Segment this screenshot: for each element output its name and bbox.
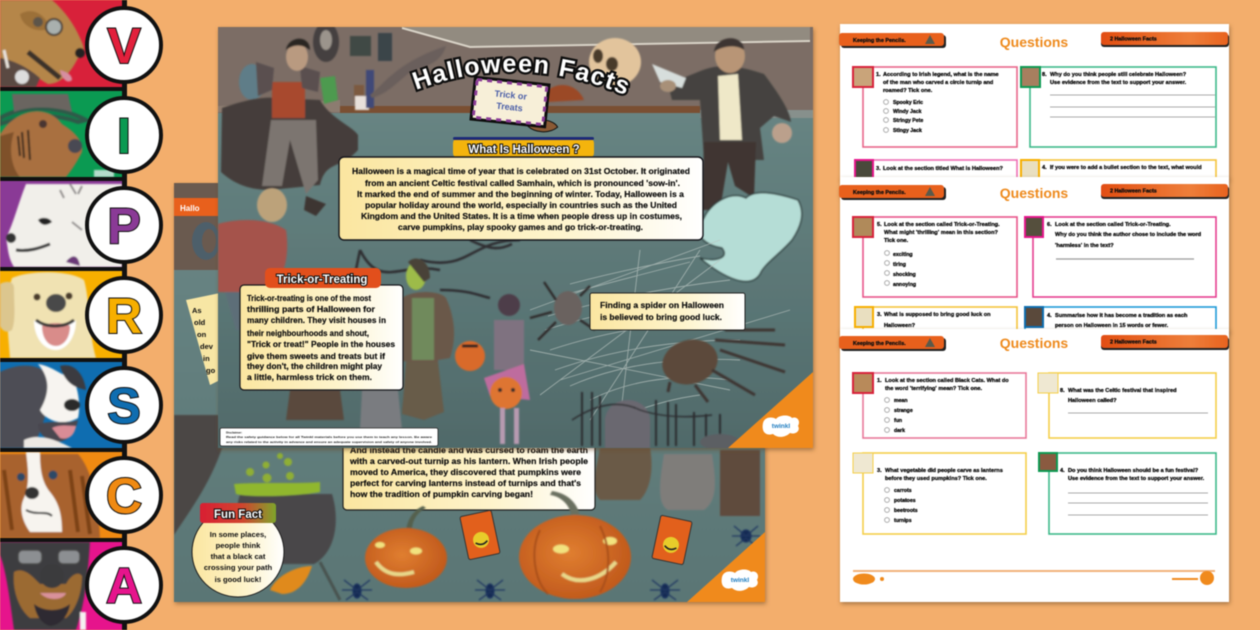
badge: striped label: Treats xyxy=(496,101,523,113)
band divider xyxy=(0,538,125,542)
twinkl corner xyxy=(687,532,765,602)
question box 3: turnips xyxy=(894,518,912,524)
question box 4 xyxy=(1025,307,1216,333)
worksheet title: Questions xyxy=(1000,34,1068,50)
text panel: Jack o'lantern story: how the tradition of pumpkin carving began! xyxy=(350,489,533,499)
spider fact callout: is believed to bring good luck. xyxy=(600,312,722,322)
question box 4: 4. xyxy=(1042,165,1047,171)
text panel: What Is Halloween xyxy=(339,157,703,240)
letter badge: P xyxy=(87,188,161,262)
text panel: Trick-or-Treating: Trick-or-treating is one of the most xyxy=(247,293,371,303)
letter badge: C: C xyxy=(106,468,142,524)
spider fact callout xyxy=(590,293,745,330)
text panel: What Is Halloween: from an ancient Celtic festival called Samhain, which is pronounced 'sow-in'. xyxy=(365,178,680,188)
question box 4: If you were to add a bullet section to the text, what would xyxy=(1050,165,1202,171)
slanted text note: old xyxy=(194,318,206,327)
worksheet header left xyxy=(839,185,946,200)
heading banner: What Is Halloween xyxy=(453,137,594,158)
question box 3: beetroots xyxy=(894,508,918,514)
bat xyxy=(370,46,446,98)
letter badge: R: R xyxy=(106,288,142,344)
question box 3 xyxy=(853,453,1026,534)
question box 1: strange xyxy=(894,408,913,414)
question box 2: Why do you think people still celebrate Halloween? xyxy=(1050,72,1187,78)
text panel: Jack o'lantern story: And instead the candle and was cursed to roam the earth xyxy=(350,445,588,455)
letter badge: S xyxy=(87,368,161,442)
question box 2: Look at the section called Trick-or-Treating. xyxy=(1055,222,1171,228)
worksheet title: Questions xyxy=(1000,185,1068,201)
twinkl corner: twinkl xyxy=(772,423,790,430)
back slide wall and heading strip: Hallo xyxy=(180,204,200,213)
worksheet header left: Keeping the Pencils. xyxy=(853,38,906,44)
letter badge: A xyxy=(87,548,161,622)
worksheet header right: 2 Halloween Facts xyxy=(1110,188,1157,194)
small spider xyxy=(530,282,595,340)
text panel: Trick-or-Treating: thrilling parts of Halloween for xyxy=(247,304,376,314)
question box 2: Halloween called? xyxy=(1068,398,1117,404)
arc path for title xyxy=(416,72,632,98)
slanted text note: in xyxy=(203,354,210,363)
worksheet header right: 2 Halloween Facts xyxy=(1110,340,1157,346)
green-faced boy with bucket xyxy=(398,259,485,420)
text panel: Jack o'lantern story: perfect for carving lanterns instead of turnips and that's xyxy=(350,478,581,488)
question box 4: Do you think Halloween should be a fun festival? xyxy=(1068,468,1199,474)
tree stump and headstone xyxy=(286,390,402,430)
worksheet header right: 2 Halloween Facts xyxy=(1110,36,1157,42)
question box 2 xyxy=(1021,67,1216,147)
question box 1: dark xyxy=(894,428,905,434)
text panel: What Is Halloween: carve pumpkins, play spooky games and go trick-or-treating. xyxy=(398,222,643,232)
text panel: Trick-or-Treating: "Trick or treat!" People in the houses xyxy=(247,339,395,349)
question box 1: annoying xyxy=(893,282,916,288)
question box 3: Look at the section titled What is Halloween? xyxy=(883,166,1004,172)
question box 2: 6. xyxy=(1047,222,1052,228)
ghost xyxy=(699,193,802,281)
question box 3: What is supposed to bring good luck on xyxy=(884,312,991,318)
question box 3: potatoes xyxy=(894,498,916,504)
text panel: Trick-or-Treating: give them sweets and treats but if xyxy=(247,351,385,361)
question box 4: Use evidence from the text to support your answer. xyxy=(1068,476,1205,482)
slanted text note xyxy=(186,293,220,385)
dark tree trunk xyxy=(174,414,222,534)
worksheet header left: Keeping the Pencils. xyxy=(853,190,906,196)
spider web xyxy=(530,240,790,420)
question box 1: the word 'terrifying' mean? Tick one. xyxy=(885,386,982,392)
question box 1 xyxy=(853,67,1017,147)
question box 2: 8. xyxy=(1060,388,1065,394)
band divider xyxy=(0,448,125,452)
dark tree branches xyxy=(354,240,520,300)
pumpkin small xyxy=(365,506,447,588)
worksheet header left xyxy=(839,336,946,351)
panel: worksheet 3 xyxy=(839,329,1229,602)
band: P purple dog xyxy=(0,181,122,267)
question box 2: What was the Celtic festival that inspired xyxy=(1068,388,1177,394)
disclaimer note: Disclaimer: xyxy=(226,430,242,434)
question box 1: of the man who carved a circle turnip and xyxy=(883,80,994,86)
question box 1: mean xyxy=(894,398,908,404)
letter badge: I xyxy=(87,98,161,172)
band divider xyxy=(0,177,125,181)
question box 4 xyxy=(1039,453,1216,534)
letter badge: V xyxy=(87,8,161,82)
slanted text note: go xyxy=(206,366,216,375)
text panel: What Is Halloween: popular holiday around the world, especially in countries such as the United xyxy=(365,200,677,210)
worksheet title: Questions xyxy=(1000,335,1068,351)
jack-o-lantern card right xyxy=(652,515,692,565)
question box 4: 4. xyxy=(1060,468,1065,474)
spine line xyxy=(122,0,127,630)
question box 1 xyxy=(853,217,1017,297)
question box 1: 1. xyxy=(877,378,882,384)
text panel: Trick-or-Treating: a little, harmless trick on them. xyxy=(247,372,372,382)
heading banner: Trick-or-Treating xyxy=(265,268,381,288)
question box 1: exciting xyxy=(893,252,913,258)
question box 3: What vegetable did people carve as lanterns xyxy=(885,468,1003,474)
text panel: What Is Halloween: Halloween is a magical time of year that is celebrated on 31st October. It originated xyxy=(352,166,690,176)
girl with pumpkin xyxy=(484,294,530,444)
heading banner: Trick-or-Treating: Trick-or-Treating xyxy=(277,274,367,286)
worksheet header right xyxy=(1101,335,1229,350)
cauldron with green slime xyxy=(234,453,340,600)
band divider xyxy=(0,267,125,271)
question box 1: tiring xyxy=(893,262,906,268)
question box 2: Use evidence from the text to support your answer. xyxy=(1050,80,1187,86)
question box 1: Look at the section called Black Cats. What do xyxy=(885,378,1009,384)
question box 1: roamed? Tick one. xyxy=(883,88,933,94)
question box 2: 8. xyxy=(1042,72,1047,78)
worksheet header left xyxy=(839,33,946,48)
text panel: Trick-or-Treating: their neighbourhoods and shout, xyxy=(247,328,369,338)
text panel: What Is Halloween: It marked the end of summer and the beginning of winter. Today, Halloween is a xyxy=(357,189,684,199)
question box 4: person on Halloween in 15 words or fewer. xyxy=(1055,323,1169,329)
text panel: Jack o'lantern story: moved to America, they discovered that pumpkins were xyxy=(350,467,581,477)
band divider xyxy=(0,358,125,362)
panel: back slide, Halloween Facts page 2 xyxy=(174,183,765,602)
question box 3: before they used pumpkins? Tick one. xyxy=(885,476,987,482)
jack-o-lantern card left xyxy=(460,510,500,560)
question box 1: Stingy Jack xyxy=(893,128,922,134)
man with torn suit xyxy=(652,38,792,210)
slanted text note: dev xyxy=(200,342,214,351)
question box 2 xyxy=(1025,217,1216,297)
worksheet header left: Keeping the Pencils. xyxy=(853,341,906,347)
slanted text note: As xyxy=(192,306,202,315)
question box 3: Halloween? xyxy=(884,323,916,329)
letter badge: R xyxy=(87,278,161,352)
question box 1: According to Irish legend, what is the name xyxy=(883,72,999,78)
tree trunks and sack xyxy=(595,448,760,516)
heading: Halloween Facts arched title: Halloween Facts xyxy=(408,56,631,96)
band: S blue dog xyxy=(0,362,122,448)
fun fact callout: is good luck! xyxy=(215,575,261,584)
fun fact callout: people think xyxy=(216,541,261,550)
band divider xyxy=(0,87,125,91)
picture frames and shelf objects xyxy=(239,22,584,110)
fun fact callout: that a black cat xyxy=(211,552,266,561)
letter badge: I: I xyxy=(117,108,131,164)
question box 1: 1. xyxy=(876,72,881,78)
text panel: What Is Halloween: Kingdom and the United States. It is a time when people dress up in costumes, xyxy=(361,211,682,221)
pumpkin large xyxy=(519,491,631,599)
disclaimer note: Read the safety guidance below for all Twinkl materials before you use them to teach any lesson. Be aware xyxy=(226,435,433,439)
text panel: Jack o'lantern story: with a carved-out turnip as his lantern. When Irish people xyxy=(349,456,588,466)
fun fact callout: Fun Fact xyxy=(214,509,262,521)
question box 3: 3. xyxy=(877,468,882,474)
question box 3: 3. xyxy=(877,312,882,318)
heading banner: What Is Halloween: What Is Halloween ? xyxy=(468,144,580,156)
text panel: Jack o'lantern story xyxy=(343,442,595,510)
worksheet header right xyxy=(1101,32,1229,47)
question box 2: 'harmless' in the text? xyxy=(1055,243,1114,249)
badge: striped label: Trick or xyxy=(494,88,528,102)
question box 4 xyxy=(1021,160,1216,180)
wall and ceiling xyxy=(218,27,813,118)
question box 1: shocking xyxy=(893,272,916,278)
floor xyxy=(216,112,816,454)
question box 1: Look at the section called Trick-or-Treating. xyxy=(884,222,1000,228)
question box 3: 3. xyxy=(876,166,881,172)
spider fact callout: Finding a spider on Halloween xyxy=(600,300,724,310)
panel: VIPERS dog strip xyxy=(0,0,161,630)
question box 3 xyxy=(855,160,1017,180)
text panel: Trick-or-Treating: many children. They visit houses in xyxy=(247,315,386,325)
question box 1: Stringy Pete xyxy=(893,118,923,124)
band: V red dog xyxy=(0,0,122,87)
question box 2: Why do you think the author chose to include the word xyxy=(1055,232,1202,238)
large spider xyxy=(657,330,785,402)
band: I green dog xyxy=(0,91,122,177)
question box 4: 4. xyxy=(1047,313,1052,319)
panel: worksheet 2 xyxy=(839,177,1229,333)
slanted text note: on xyxy=(197,330,207,339)
worksheet footer xyxy=(853,570,1215,585)
letter badge: S: S xyxy=(107,378,141,434)
text panel: Trick-or-Treating: they don't, the children might play xyxy=(247,361,382,371)
disclaimer note xyxy=(220,428,438,446)
fun fact callout xyxy=(192,503,284,597)
fun fact callout: crossing your path xyxy=(204,563,273,572)
panel: front slide, Halloween Facts page 1 xyxy=(216,26,816,454)
panel: worksheet 1 xyxy=(839,24,1229,180)
fun fact callout: In some places, xyxy=(210,530,266,539)
gravestone and fence xyxy=(572,392,740,450)
question box 1: What might 'thrilling' mean in this section? xyxy=(884,230,998,236)
letter badge: V: V xyxy=(107,18,141,74)
band: A pink dog xyxy=(0,542,122,630)
back slide wall and heading strip xyxy=(173,182,219,270)
question box 1: Spooky Eric xyxy=(893,100,923,106)
question box 1: Tick one. xyxy=(884,238,909,244)
skull xyxy=(589,38,641,86)
vampire figure xyxy=(221,39,358,216)
spiders xyxy=(342,526,760,600)
scarecrow figure xyxy=(218,187,288,294)
letter badge: A: A xyxy=(106,558,142,614)
question box 3 xyxy=(855,307,1017,333)
band: C orange dog xyxy=(0,452,122,538)
twinkl corner: twinkl xyxy=(731,577,749,584)
question box 3: carrots xyxy=(894,488,912,494)
text panel: Trick-or-Treating xyxy=(240,285,403,390)
question box 1: Windy Jack xyxy=(893,109,922,115)
question box 1: 5. xyxy=(877,222,882,228)
letter badge: P: P xyxy=(107,198,141,254)
twinkl corner xyxy=(728,372,813,448)
question box 4: Summarise how it has become a tradition as each xyxy=(1055,313,1188,319)
badge: striped label xyxy=(470,77,562,133)
question box 1 xyxy=(853,373,1026,438)
question box 2 xyxy=(1038,373,1216,438)
disclaimer note: any risks related to the activity in advance and ensure an adequate supervision and safety of anyone involved. xyxy=(226,440,432,444)
letter badge: C xyxy=(87,458,161,532)
question box 1: fun xyxy=(894,418,902,424)
back slide floor xyxy=(172,269,768,606)
worksheet header right xyxy=(1101,184,1229,199)
band: R yellow dog xyxy=(0,271,122,358)
